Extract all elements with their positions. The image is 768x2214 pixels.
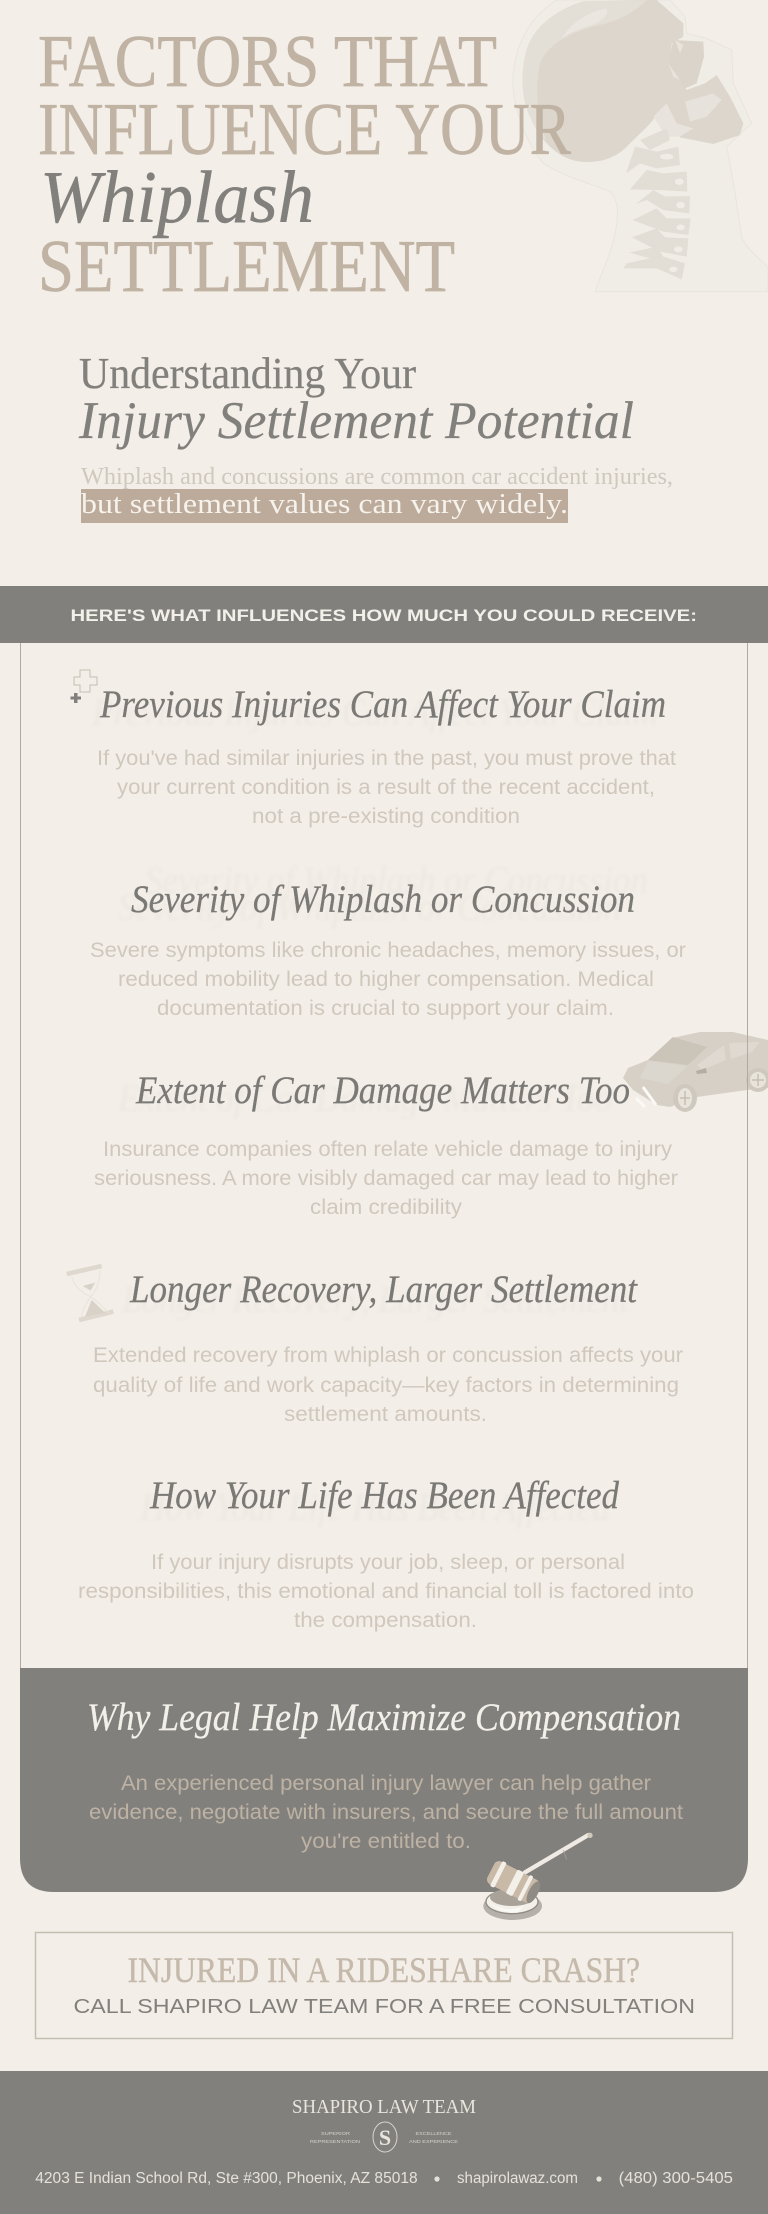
intro block (78, 349, 673, 523)
factor 3: car damage (94, 1069, 678, 1219)
body: Extended recovery from whiplash or concussion affects your (93, 1344, 683, 1367)
heading shadow below: Severity of Whiplash or Concussion (118, 886, 621, 929)
left motto: SUPERIOR (321, 2131, 351, 2136)
body: reduced mobility lead to higher compensation. Medical (118, 968, 654, 991)
right motto (409, 2131, 458, 2144)
title line: influence your: INFLUENCE YOUR (38, 89, 572, 171)
title line: whiplash: Whiplash (40, 157, 314, 239)
address: 4203 E Indian School Rd, Ste #300, Phoenix, AZ 85018 (35, 2170, 418, 2187)
left motto (310, 2131, 360, 2144)
icon: hourglass (67, 1266, 113, 1320)
highlighted intro sentence: but settlement values can vary widely. (81, 489, 568, 520)
icon: damaged car (623, 1032, 768, 1112)
cta subline: CALL SHAPIRO LAW TEAM FOR A FREE CONSULTATION (74, 1996, 695, 2018)
body: If you've had similar injuries in the past, you must prove that (97, 747, 676, 770)
title line: settlement: SETTLEMENT (38, 226, 455, 308)
body: documentation is crucial to support your claim. (157, 997, 614, 1020)
body: seriousness. A more visibly damaged car may lead to higher (94, 1167, 678, 1190)
heading: Extent of Car Damage Matters Too (135, 1069, 630, 1112)
call to action box (36, 1932, 732, 2038)
heading shadow: How Your Life Has Been Affected (139, 1486, 610, 1529)
title line: factors that: FACTORS THAT (38, 21, 497, 103)
body: your current condition is a result of the recent accident, (117, 776, 655, 799)
body: you're entitled to. (301, 1830, 471, 1853)
heading: Why Legal Help Maximize Compensation (87, 1696, 681, 1739)
body (90, 939, 686, 1020)
logo seal (373, 2122, 397, 2152)
body (94, 1138, 678, 1219)
heading shadow: Extent of Car Damage Matters Too (117, 1077, 612, 1120)
left motto: REPRESENTATION (310, 2139, 360, 2144)
body (93, 1344, 683, 1426)
intro heading line 1: Understanding Your (79, 349, 416, 398)
heading: How Your Life Has Been Affected (149, 1474, 619, 1517)
intro paragraph line: Whiplash and concussions are common car accident injuries, (81, 464, 673, 490)
cta headline: INJURED IN A RIDESHARE CRASH? (128, 1950, 640, 1990)
intro heading line 2: Injury Settlement Potential (78, 392, 634, 450)
illustration: skull and cervical spine in profile (513, 0, 768, 292)
body: settlement amounts. (284, 1403, 487, 1426)
body (89, 1772, 683, 1853)
separator dot (596, 2176, 602, 2182)
heading shadow above: Severity of Whiplash or Concussion (145, 859, 648, 902)
body (78, 1551, 694, 1632)
body: quality of life and work capacity—key factors in determining (93, 1374, 679, 1397)
heading shadow: Longer Recovery, Larger Settlement (121, 1278, 630, 1321)
phone: (480) 300-5405 (619, 2170, 733, 2187)
body: responsibilities, this emotional and financial toll is factored into (78, 1580, 694, 1603)
separator dot (434, 2176, 440, 2182)
title (38, 21, 572, 308)
factor 1: previous injuries (91, 683, 676, 828)
factor 5: life impact (78, 1474, 694, 1632)
body: Severe symptoms like chronic headaches, memory issues, or (90, 939, 686, 962)
firm name: SHAPIRO LAW TEAM (292, 2096, 476, 2118)
section band (0, 586, 768, 643)
right motto: AND EXPERIENCE (409, 2139, 458, 2144)
section band: HERE'S WHAT INFLUENCES HOW MUCH YOU COULD RECEIVE: (70, 606, 697, 625)
body: Insurance companies often relate vehicle damage to injury (103, 1138, 673, 1161)
body: not a pre-existing condition (252, 805, 520, 828)
heading: Longer Recovery, Larger Settlement (129, 1268, 638, 1311)
body: evidence, negotiate with insurers, and secure the full amount (89, 1801, 683, 1824)
right motto: EXCELLENCE (416, 2131, 452, 2136)
heading shadow: Previous Injuries Can Affect Your Claim (91, 691, 658, 734)
content frame (20, 643, 748, 1668)
body (97, 747, 676, 828)
body: If your injury disrupts your job, sleep, or personal (151, 1551, 625, 1574)
footer (0, 2071, 768, 2214)
icon: medical crosses (70, 670, 97, 703)
body: the compensation. (294, 1609, 477, 1632)
factor 2: severity (90, 859, 686, 1020)
panel: legal help (20, 1668, 748, 1892)
website: shapirolawaz.com (457, 2170, 578, 2187)
factor 4: recovery (93, 1268, 683, 1426)
logo seal: S (379, 2125, 391, 2150)
heading: Severity of Whiplash or Concussion (131, 878, 635, 921)
heading: Previous Injuries Can Affect Your Claim (99, 683, 666, 726)
body: claim credibility (310, 1196, 463, 1219)
icon: gavel (483, 1833, 593, 1920)
body: An experienced personal injury lawyer can help gather (121, 1772, 651, 1795)
